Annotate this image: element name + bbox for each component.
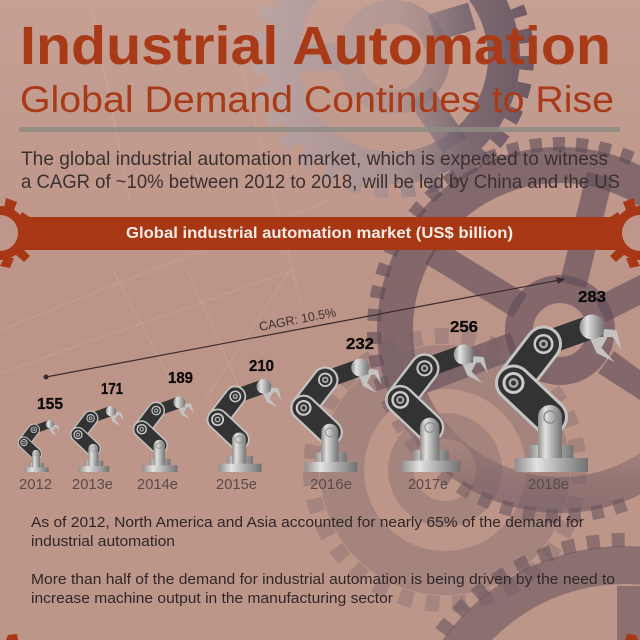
banner with end gears <box>0 198 640 268</box>
values: 155 <box>37 396 63 413</box>
year labels: 2016e <box>310 476 352 493</box>
bottom text: More than half of the demand for industrial automation is being driven by the need to <box>31 572 615 588</box>
subtitle: Global Demand Continues to Rise <box>20 79 614 120</box>
CAGR label: CAGR: 10.5% <box>258 305 337 334</box>
year labels <box>19 476 569 493</box>
intro text: a CAGR of ~10% between 2012 to 2018, will be led by China and the US <box>21 171 620 193</box>
values: 283 <box>578 289 606 306</box>
year labels: 2012 <box>19 476 52 493</box>
robot 2018e <box>502 314 622 472</box>
year labels: 2017e <box>408 476 448 493</box>
title: Industrial Automation <box>20 16 611 76</box>
gear: bottom right <box>441 540 640 640</box>
values: 189 <box>168 370 193 387</box>
intro text: The global industrial automation market, which is expected to witness <box>21 148 608 170</box>
robot 2014e <box>136 396 194 472</box>
robot 2016e <box>296 359 381 472</box>
year labels: 2014e <box>137 476 178 493</box>
bottom text: industrial automation <box>31 534 175 550</box>
robot 2012 <box>20 420 60 472</box>
values <box>37 289 606 413</box>
icon: left gear <box>0 198 31 268</box>
year labels: 2013e <box>72 476 113 493</box>
values: 256 <box>450 319 478 336</box>
icon: bottom corner gears <box>6 634 638 640</box>
icon: right gear <box>609 198 640 268</box>
gear: top centre <box>259 0 527 191</box>
chart: robot arms <box>20 314 621 472</box>
intro text <box>21 148 620 193</box>
year labels: 2015e <box>216 476 257 493</box>
background light scratch lines <box>0 0 330 400</box>
values: 232 <box>346 336 374 353</box>
robot 2015e <box>211 379 281 472</box>
gear: centre bottom <box>311 336 579 604</box>
robot 2017e <box>391 344 488 472</box>
robot 2013e <box>73 406 123 472</box>
bottom text: increase machine output in the manufacturing sector <box>31 591 393 607</box>
gear: large right <box>374 144 640 516</box>
bottom text <box>31 515 615 607</box>
bottom text: As of 2012, North America and Asia accounted for nearly 65% of the demand for <box>31 515 584 531</box>
divider <box>19 127 620 132</box>
values: 210 <box>249 358 274 375</box>
banner text: Global industrial automation market (US$ billion) <box>126 225 513 242</box>
banner bar <box>19 217 621 250</box>
year labels: 2018e <box>528 476 569 493</box>
CAGR arrow <box>44 277 565 380</box>
values: 171 <box>101 381 123 398</box>
